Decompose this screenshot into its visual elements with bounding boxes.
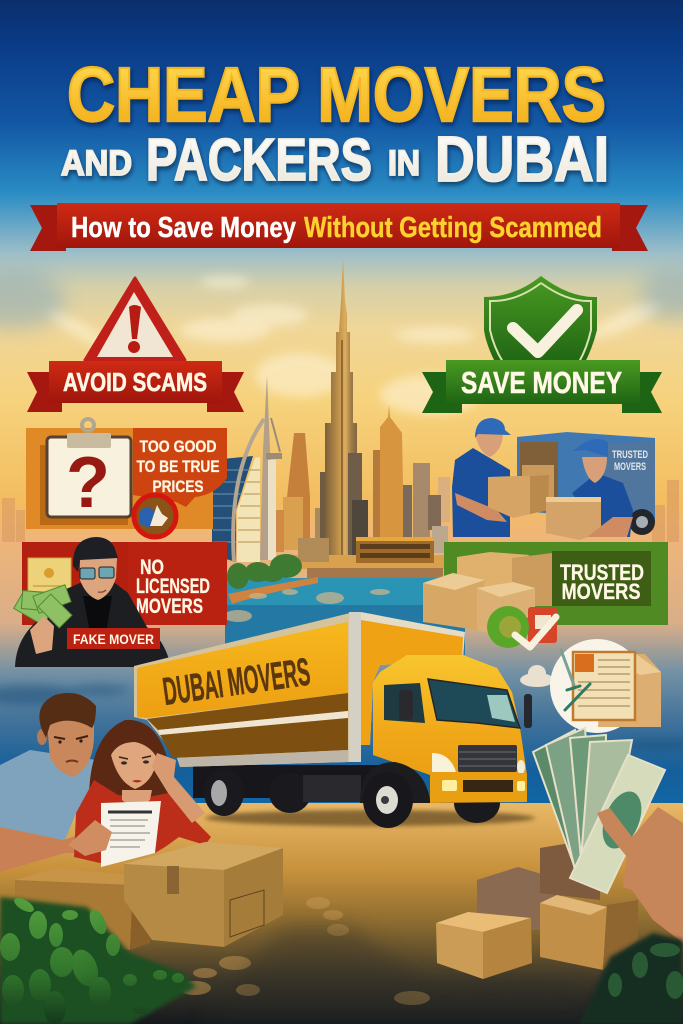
subtitle text (71, 212, 602, 244)
dark road patch (200, 925, 620, 1024)
wheel arch (360, 762, 430, 803)
van text: TRUSTED (612, 449, 648, 461)
stack of cardboard boxes (423, 552, 552, 633)
low waterfront building (356, 537, 434, 563)
dark cloud bands over water (0, 685, 683, 751)
woman (74, 720, 211, 863)
icon: clipboard with question mark: ? (66, 443, 110, 523)
box: front large (124, 842, 283, 947)
blue sky haze at the sides (0, 270, 683, 330)
plants left (0, 895, 196, 1024)
box: top back (540, 843, 600, 900)
cargo box side (134, 613, 350, 767)
title line 2: IN (388, 144, 420, 183)
document and box illustration (520, 639, 661, 733)
man's hand (68, 820, 112, 856)
movers loading van (452, 418, 655, 540)
chassis (193, 765, 383, 798)
man (0, 693, 113, 872)
text: too good to be true prices: PRICES (152, 477, 204, 496)
label: fake mover: FAKE MOVER (73, 631, 154, 647)
title line 1: CHEAP MOVERS (67, 52, 606, 138)
plants right (579, 933, 683, 1024)
panel: too good to be true prices (26, 419, 227, 537)
icon: pen and marker (561, 650, 590, 710)
icon: clipboard with question mark (47, 419, 131, 523)
icon: cash fan (14, 585, 72, 628)
box carried right (546, 497, 601, 540)
heading: avoid scams: AVOID SCAMS (63, 367, 207, 397)
title line 2: PACKERS (146, 127, 372, 193)
truck ground shadow (205, 810, 535, 826)
Burj Khalifa (325, 258, 362, 560)
icon: prohibited sign (134, 495, 176, 537)
waterfront land (277, 555, 447, 569)
title line 2: AND (61, 144, 132, 183)
cab (373, 655, 532, 803)
box: front (436, 912, 532, 979)
subtitle text: How to Save Money (71, 212, 296, 244)
couple reading contract (0, 693, 211, 872)
quay wall (307, 568, 443, 578)
box: back left (15, 868, 150, 950)
icon: green badge and check (487, 606, 557, 648)
text: no licensed movers: LICENSED (136, 575, 210, 598)
cardboard boxes left (15, 842, 283, 950)
Dubai skyline (276, 258, 450, 578)
delivery truck (134, 612, 532, 828)
fuel tank (303, 775, 361, 802)
box: right (540, 895, 638, 970)
title (61, 52, 609, 195)
icon: green shield with check (484, 276, 597, 366)
label: trusted movers (560, 560, 644, 604)
panel: trusted movers (423, 542, 668, 648)
Burj Al Arab hotel (212, 375, 282, 562)
worker left (452, 418, 511, 537)
worker right (572, 439, 633, 537)
text: too good to be true prices: TO BE TRUE (136, 457, 220, 476)
arm of right worker (587, 517, 633, 537)
man's arm (0, 827, 113, 872)
heading: save money: SAVE MONEY (461, 365, 622, 400)
tower: left orange building (283, 433, 310, 550)
title line 2: DUBAI (435, 123, 609, 195)
subtitle text: Without Getting Scammed (304, 212, 602, 244)
panel: save money header (422, 276, 662, 413)
label: trusted movers: TRUSTED (560, 560, 644, 585)
cargo front panel (361, 612, 465, 745)
towers around Burj base (315, 508, 331, 548)
small cloud (520, 665, 554, 687)
panel: avoid scams header (27, 278, 244, 412)
contract paper (101, 801, 161, 867)
pale tower right (438, 477, 450, 522)
box carried left (488, 475, 549, 518)
panel: no licensed movers (22, 542, 227, 625)
ground stain patches (179, 897, 430, 1005)
label: trusted movers: MOVERS (562, 579, 640, 604)
icon: warning triangle (85, 278, 185, 360)
lagoon and green island (224, 554, 465, 655)
van text (612, 449, 648, 473)
text: no licensed movers: MOVERS (136, 595, 203, 618)
front wheel (363, 772, 413, 828)
text: no licensed movers (136, 556, 210, 618)
subtitle ribbon (30, 203, 648, 251)
box: dark back (477, 867, 562, 930)
icon: certificate (28, 558, 71, 613)
text: too good to be true prices (136, 437, 220, 496)
fake mover character (14, 537, 171, 667)
text: no licensed movers: NO (140, 556, 164, 579)
cardboard boxes right (436, 843, 638, 979)
wheels (204, 768, 500, 823)
van text: MOVERS (614, 461, 646, 473)
text: too good to be true prices: TOO GOOD (140, 437, 216, 456)
woman's face (121, 760, 149, 765)
faded skyline left and right (2, 480, 679, 542)
delivery truck: DUBAI MOVERS (160, 651, 313, 714)
title line 2 (61, 123, 609, 195)
van (517, 432, 655, 535)
man's face (54, 736, 88, 739)
ground (0, 803, 683, 1024)
tower: right pointed building (373, 450, 382, 537)
hand holding cash (597, 807, 683, 943)
icon: sunglasses (80, 567, 114, 579)
icon: fan of banknotes (533, 728, 665, 893)
woman's arm (152, 753, 205, 823)
clouds (42, 276, 665, 415)
